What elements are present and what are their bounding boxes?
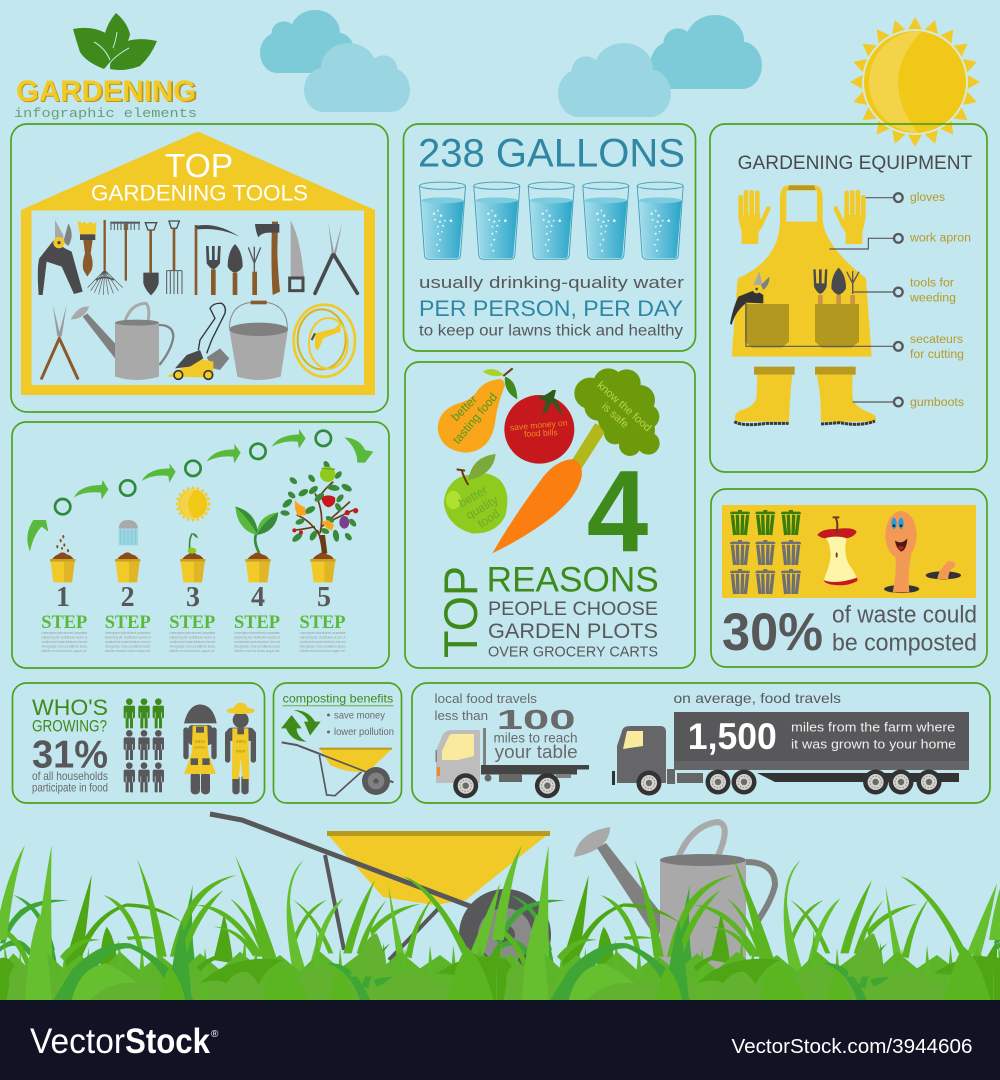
step body text: Lorem ipsum dolor sit amet, consectetur <box>41 631 88 635</box>
icon: lawn mower <box>167 303 229 379</box>
label: save money on food bills: food bills <box>524 427 558 439</box>
label: better quality food <box>456 483 502 531</box>
icon: apple core <box>817 517 857 585</box>
list: benefits: lower pollution <box>334 726 394 738</box>
step body text: condimentum justo tincidunt, erat orci <box>41 640 88 644</box>
panel: growing steps <box>12 422 389 668</box>
icon: right glove <box>836 190 866 244</box>
yellow banner <box>722 505 976 598</box>
step numbers: 5 <box>317 582 331 613</box>
text: your table: your table <box>495 742 578 762</box>
compost illustration <box>730 510 961 594</box>
icon: loppers <box>315 222 357 293</box>
icon: trowel <box>228 244 243 295</box>
icon: woman gardener <box>184 704 217 794</box>
compost illustration <box>281 710 393 796</box>
icon: boots <box>734 367 876 425</box>
footer id: VectorStock.com/3944606 <box>732 1035 972 1058</box>
heading: composting benefits: composting benefits <box>283 691 393 705</box>
label: better quality food: quality <box>463 493 501 522</box>
step numbers: 3 <box>186 582 200 613</box>
icon: leaf rake <box>88 220 123 295</box>
text: drinking-quality water: usually drinking-quality water <box>419 273 684 292</box>
step labels: STEP <box>300 612 346 633</box>
icon: man gardener: men <box>236 748 246 754</box>
icon: sun small <box>175 486 211 522</box>
text: miles from the farm: miles from the farm where <box>791 721 955 735</box>
cloud group right <box>558 15 762 117</box>
text: garden plots: GARDEN PLOTS <box>488 620 658 643</box>
icon: left glove <box>738 190 768 244</box>
heading: gardening tools: GARDENING TOOLS <box>91 181 308 206</box>
icon: small truck <box>436 728 589 798</box>
icon: scythe <box>195 225 239 295</box>
step illustrations <box>27 429 373 582</box>
step numbers: 1 <box>56 582 70 613</box>
title text front: GARDENING <box>16 75 196 108</box>
heading: gardening equipment: GARDENING EQUIPMENT <box>738 153 973 174</box>
stat: 31%: 31% <box>32 734 108 777</box>
icon: sun <box>850 17 980 147</box>
arrows <box>27 429 373 552</box>
subtitle: infographic elements <box>14 106 197 121</box>
list: benefits: save money <box>334 709 386 721</box>
icon: watering can <box>71 303 173 380</box>
text: grown to your home: it was grown to your home <box>791 737 956 751</box>
icon: worm <box>884 511 961 593</box>
icon: broccoli <box>570 368 660 468</box>
text: miles to reach: miles to reach <box>494 730 578 746</box>
icon: seeds <box>56 535 69 552</box>
panel: compost 30 percent <box>711 489 987 667</box>
cloud light left <box>304 43 410 112</box>
step body text: Lorem ipsum dolor sit amet, consectetur <box>169 631 216 635</box>
logo: vectorstock <box>30 1022 219 1061</box>
icon: paint brush <box>78 222 97 277</box>
label: know the food is safe: know the food <box>595 379 653 434</box>
step body text: condimentum justo tincidunt, erat orci <box>105 640 151 644</box>
heading: top: TOP <box>165 148 233 185</box>
icon: pocket tools <box>813 268 859 304</box>
icon: fruit tree <box>280 460 358 553</box>
icon: spade <box>143 223 159 295</box>
step body text: nisl egestas. Cras convallis leo lectus <box>300 644 346 648</box>
icon: cultivator <box>248 247 261 295</box>
text: reasons: REASONS <box>487 561 659 600</box>
label: better tasting food: better <box>448 392 480 424</box>
step body text: Lorem ipsum dolor sit amet, consectetur <box>234 631 281 635</box>
stat: 100: 100 <box>497 704 576 735</box>
step body text: ultricies rhoncus lectus augue vel. <box>105 649 151 653</box>
icon: apron <box>732 185 872 357</box>
step body text: ultricies rhoncus lectus augue vel. <box>41 649 87 653</box>
callout labels: weeding <box>909 293 956 305</box>
fruit and vegetable illustrations <box>438 368 660 553</box>
panel: top gardening tools <box>11 124 388 412</box>
icon: woman gardener: women <box>194 746 206 750</box>
icon: saw <box>290 221 304 291</box>
text: people choose: PEOPLE CHOOSE <box>488 599 658 620</box>
logo: gardening <box>14 13 198 121</box>
step body text <box>41 631 346 653</box>
step labels: STEP <box>105 612 151 633</box>
panel: composting benefits <box>274 683 402 803</box>
icon: sprout small <box>188 533 198 554</box>
step body text: ultricies rhoncus lectus augue vel. <box>300 649 346 653</box>
text: per person per day: PER PERSON, PER DAY <box>419 296 683 321</box>
panel: gardening equipment <box>710 124 987 472</box>
title text: GARDENING <box>17 76 198 109</box>
step labels: STEP <box>234 612 280 633</box>
icon: apple <box>444 454 507 533</box>
label: save money on food bills: save money on <box>510 417 568 433</box>
text: top vertical: TOP <box>434 566 487 658</box>
step body text: condimentum justo tincidunt, erat orci <box>169 640 216 644</box>
icon: seedling <box>235 507 278 553</box>
equipment illustration <box>730 185 903 425</box>
step body text: adipiscing elit. Vestibulum auctor ut <box>300 636 346 640</box>
step labels: STEP <box>41 612 88 633</box>
step body text: adipiscing elit. Vestibulum auctor ut <box>41 636 87 640</box>
step body text: nisl egestas. Cras convallis leo lectus <box>105 644 151 648</box>
grass foreground <box>0 845 1000 1000</box>
heading: 238 gallons: 238 GALLONS <box>418 132 685 176</box>
icon: woman gardener: 54% <box>195 739 206 745</box>
logo: vectorstock: Vector <box>30 1022 125 1061</box>
icon: tomato <box>504 390 574 464</box>
step numbers <box>56 582 331 613</box>
icon: pitchfork <box>167 221 182 294</box>
step numbers: 2 <box>121 582 135 613</box>
row of water glasses <box>420 182 683 259</box>
step body text: adipiscing elit. Vestibulum auctor ut <box>234 636 280 640</box>
callout labels: gloves <box>910 192 945 204</box>
step body text: adipiscing elit. Vestibulum auctor ut <box>105 636 151 640</box>
step labels <box>41 612 346 633</box>
footer bar <box>0 1000 1000 1080</box>
logo: vectorstock: ® <box>211 1029 219 1040</box>
pots <box>50 552 336 582</box>
house frame <box>21 132 375 395</box>
icon: metal rake <box>110 222 140 281</box>
stat: 30%: 30% <box>722 603 823 662</box>
step body text: ultricies rhoncus lectus augue vel. <box>169 649 215 653</box>
callout labels: tools for <box>910 278 954 290</box>
big number 4: 4 <box>587 447 648 577</box>
icon: hand fork <box>206 246 221 295</box>
icon: large truck <box>612 712 969 796</box>
text: households: of all households <box>32 769 108 783</box>
label: better tasting food: tasting food <box>450 390 500 447</box>
step body text: condimentum justo tincidunt, erat orci <box>300 640 346 644</box>
stat: 1,500: 1,500 <box>688 716 777 757</box>
step labels: STEP <box>169 612 216 633</box>
tools illustrations <box>38 220 357 380</box>
callout labels <box>909 192 971 409</box>
text: local food travels: local food travels <box>434 692 537 706</box>
step body text: ultricies rhoncus lectus augue vel. <box>234 649 280 653</box>
cloud dark left <box>260 10 355 73</box>
people illustration <box>124 698 255 794</box>
icon: water shower <box>119 520 138 545</box>
panel: 238 gallons <box>404 124 696 351</box>
step body text: nisl egestas. Cras convallis leo lectus <box>234 644 280 648</box>
large watering can <box>574 822 775 970</box>
callout lines <box>746 198 894 402</box>
text: over grocery carts: OVER GROCERY CARTS <box>488 645 658 661</box>
label: know the food is safe: is safe <box>599 401 631 431</box>
cloud light right <box>558 43 671 117</box>
step body text: condimentum justo tincidunt, erat orci <box>234 640 280 644</box>
icon: man gardener <box>227 703 255 794</box>
text: less than: less than <box>434 709 488 723</box>
heading: growing: GROWING? <box>32 717 107 736</box>
step body text: nisl egestas. Cras convallis leo lectus <box>169 644 216 648</box>
callout rings <box>894 193 903 406</box>
icon: garden hose <box>294 305 355 377</box>
icon: pocket secateurs <box>730 272 769 325</box>
text: participate: participate in food <box>32 781 108 795</box>
text: on average: on average, food travels <box>674 690 841 706</box>
step rings <box>55 431 331 514</box>
icon: secateurs <box>38 220 83 295</box>
panel: food travel trucks <box>412 683 990 803</box>
step numbers: 4 <box>251 582 265 613</box>
icon: small wheelbarrow <box>282 742 393 796</box>
icon: trash bins <box>730 510 801 594</box>
icon: pear <box>438 368 517 453</box>
step body text: adipiscing elit. Vestibulum auctor ut <box>169 636 215 640</box>
list: benefits <box>327 709 394 738</box>
icon: people grid <box>124 698 164 792</box>
step body text: Lorem ipsum dolor sit amet, consectetur <box>105 631 152 635</box>
label: better quality food: food <box>475 506 502 531</box>
cloud group left <box>260 10 410 112</box>
label: better quality food: better <box>456 483 490 510</box>
panel: top 4 reasons <box>405 362 695 668</box>
icon: carrot <box>492 459 582 553</box>
callout labels: gumboots <box>910 397 964 409</box>
icon: bucket <box>229 301 288 380</box>
label: save money on food bills <box>510 417 568 439</box>
icon: man gardener: 46% <box>236 739 246 745</box>
step body text: nisl egestas. Cras convallis leo lectus <box>41 644 88 648</box>
callout labels: for cutting <box>910 349 964 361</box>
callout labels: work apron <box>909 233 971 245</box>
icon: shears <box>42 304 78 378</box>
text: be composted: be composted <box>832 630 977 657</box>
icon: leaves <box>73 13 157 76</box>
icon: axe <box>255 222 280 295</box>
logo: vectorstock: Stock <box>125 1022 210 1061</box>
callout labels: secateurs <box>910 334 963 346</box>
large wheelbarrow <box>210 814 551 981</box>
text: keep lawns: to keep our lawns thick and healthy <box>419 323 683 340</box>
text: of waste could: of waste could <box>832 602 977 629</box>
heading: who's: WHO'S <box>32 695 108 720</box>
step body text: Lorem ipsum dolor sit amet, consectetur <box>300 631 346 635</box>
panel: who's growing <box>12 683 264 803</box>
icon: cycle arrows <box>281 710 321 742</box>
cloud dark right <box>650 15 762 89</box>
